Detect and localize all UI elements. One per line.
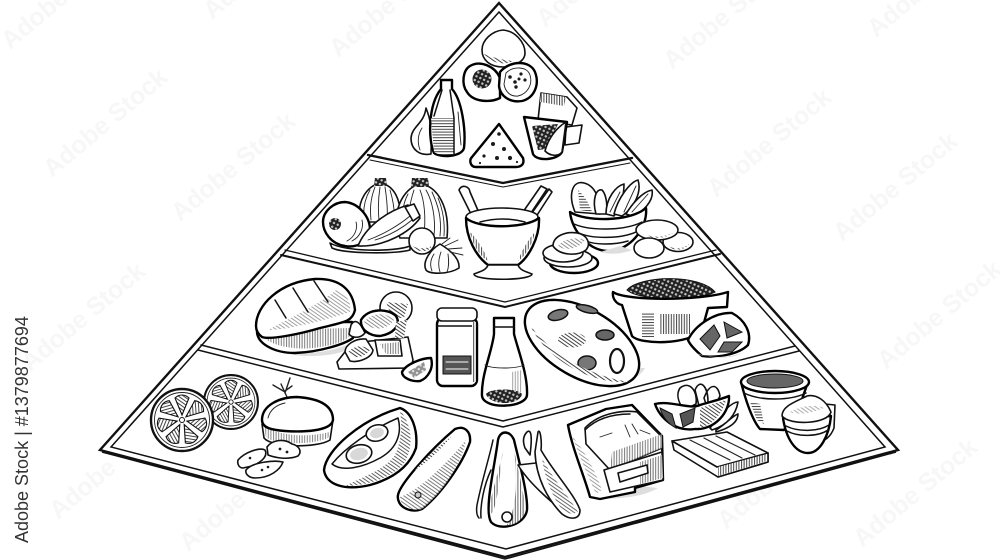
- icon: tofu tray: [672, 432, 768, 477]
- icon: mortar bowl: [466, 208, 539, 279]
- icon: small round vegetable: [409, 228, 435, 254]
- bottom tier foods: [151, 371, 835, 527]
- icon: squash: [358, 204, 420, 246]
- icon: pestles: [459, 186, 552, 226]
- icon: pumpkin small: [359, 178, 400, 222]
- icon: sliced stack: [543, 233, 598, 273]
- stock watermarks: Adobe: [712, 463, 790, 535]
- icon: potatoes: [634, 220, 693, 258]
- icon: bread loaf: [256, 279, 360, 356]
- icon: sliced pieces: [238, 440, 300, 478]
- icon: focaccia: [510, 282, 654, 404]
- icon: small cup with cream: [782, 396, 835, 453]
- icon: muffins: [345, 292, 412, 361]
- icon: cup with packet: [524, 93, 582, 159]
- icon: salad leaves: [572, 180, 652, 216]
- icon: citrus slice: [688, 313, 749, 358]
- stock credit id text: Adobe Stock | #1379877694: [12, 316, 32, 543]
- stock watermarks: Adobe: [44, 453, 122, 525]
- stock watermarks: Adobe Stock: [174, 437, 309, 557]
- tier divider: second: [281, 250, 720, 307]
- tier divider: top: [368, 155, 632, 187]
- icon: onion with roots: [425, 238, 463, 273]
- icon: avocado steak: [324, 408, 416, 487]
- icon: large bowl cup: [741, 371, 809, 430]
- icon: spice jar: [437, 308, 477, 386]
- icon: pods: [518, 431, 580, 518]
- pyramid outline: [100, 3, 898, 559]
- icon: flower bowl: [655, 384, 738, 432]
- icon: file box: [568, 405, 663, 499]
- third tier foods: [256, 279, 749, 406]
- stock watermarks: Adobe Stock: [166, 107, 301, 227]
- icon: pomegranate: [323, 202, 370, 246]
- stock watermarks: Adobe Stock: [828, 127, 963, 247]
- stock watermarks: Adobe Stock: [702, 83, 837, 203]
- icon: cutting board: [337, 337, 413, 369]
- icon: citrus slice back: [204, 375, 258, 429]
- icon: pumpkin large: [396, 178, 447, 238]
- icon: citrus slice front: [151, 389, 213, 451]
- icon: bowl of berries: [613, 279, 728, 342]
- stock watermarks: Adobe Stock: [848, 433, 983, 553]
- stock watermarks: Adobe Stock: [16, 257, 151, 377]
- icon: garlic: [411, 108, 431, 154]
- icon: carrot: [398, 428, 470, 511]
- icon: long squash: [477, 432, 527, 527]
- icon: cheese wedge: [470, 124, 523, 167]
- top tier foods: [411, 30, 582, 167]
- icon: round bun with sprig: [262, 378, 333, 446]
- icon: round bulb: [482, 30, 525, 67]
- icon: glass bottle: [482, 318, 527, 406]
- tier divider: third: [198, 345, 799, 427]
- second tier foods: [323, 178, 693, 279]
- icon: oil bottle: [430, 80, 464, 156]
- stock watermarks: Adobe Stock: [38, 63, 173, 183]
- icon: chip: [402, 358, 432, 381]
- icon: striped salad bowl: [570, 208, 646, 254]
- icon: fig halves: [463, 63, 537, 101]
- icon: plate: [330, 243, 410, 253]
